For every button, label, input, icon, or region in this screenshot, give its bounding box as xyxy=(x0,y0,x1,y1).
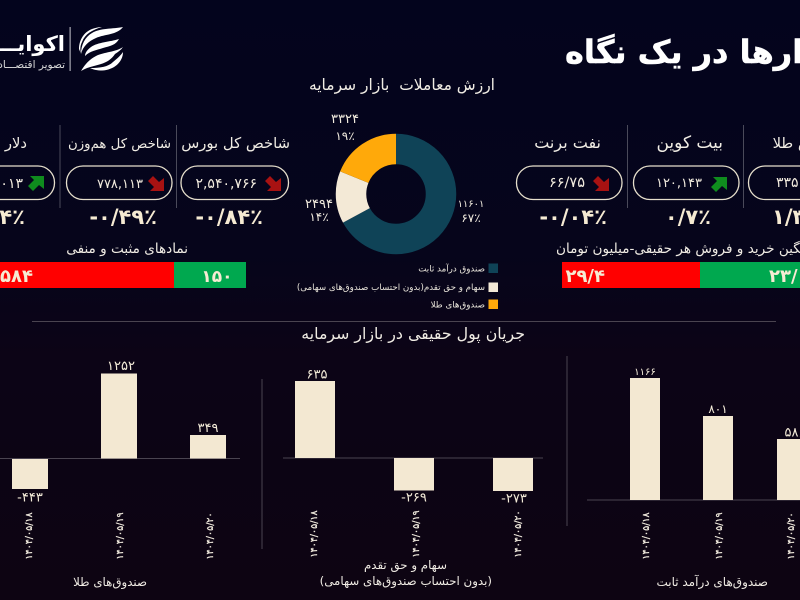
chart: fixed income funds: ۱۴۰۴/۰۵/۱۸ xyxy=(641,512,652,560)
card: dollar xyxy=(0,135,54,229)
card: gold xyxy=(748,135,800,229)
icon: down arrow xyxy=(148,176,164,191)
card: bitcoin: ۱۲۰,۱۴۳ xyxy=(656,176,702,191)
chart: fixed income funds: ۸۰۱ xyxy=(708,402,728,416)
legend: صندوق‌های طلا xyxy=(431,300,485,310)
card: total index xyxy=(181,135,290,229)
donut labels xyxy=(305,112,484,225)
logo tagline: تصویر اقتصـــاد xyxy=(0,59,65,71)
chart: stocks and rights xyxy=(283,368,543,589)
card: bitcoin: بیت کوین xyxy=(656,133,723,153)
icon: up arrow xyxy=(28,176,44,191)
bar: average buy and sell xyxy=(562,262,800,288)
donut labels: ۶۷٪ xyxy=(461,211,481,225)
chart: gold funds: ۱۴۰۴/۰۵/۲۰ xyxy=(205,512,216,560)
chart: gold funds: -۴۴۳ xyxy=(17,490,43,506)
dividers between cards xyxy=(60,125,744,208)
chart: gold funds: ۳۴۹ xyxy=(198,421,218,436)
donut labels: ۱۱۶۰۱ xyxy=(458,199,484,210)
legend xyxy=(297,262,498,310)
icon: logo mark xyxy=(79,27,123,71)
card: bitcoin xyxy=(634,133,739,229)
chart caption: صندوق‌های درآمد ثابت xyxy=(656,574,768,590)
card: brent oil: -۰/۰۴٪ xyxy=(539,205,607,229)
chart caption: سهام و حق تقدم xyxy=(364,558,447,573)
chart: fixed income funds: ۱۴۰۴/۰۵/۱۹ xyxy=(714,512,725,560)
subtitle: trading value: ارزش معاملات بازار سرمایه xyxy=(309,76,495,94)
icon: up arrow xyxy=(711,177,727,192)
chart: stocks and rights: -۲۷۳ xyxy=(501,492,527,506)
donut labels: ۱۹٪ xyxy=(335,129,355,143)
chart: fixed income funds: ۱۴۰۴/۰۵/۲۰ xyxy=(786,512,797,560)
chart: stocks and rights: (بدون احتساب صندوق‌های سهامی) xyxy=(320,574,492,589)
bar: positive negative symbols xyxy=(0,262,246,288)
card: total index: شاخص کل بورس xyxy=(181,135,290,152)
chart: gold funds: ۱۴۰۴/۰۵/۱۸ xyxy=(24,512,35,560)
chart caption: صندوق‌های طلا xyxy=(73,575,147,590)
chart: stocks and rights: ۱۴۰۴/۰۵/۲۰ xyxy=(513,510,524,558)
heading: positive and negative symbols: نمادهای مثبت و منفی xyxy=(66,241,188,257)
legend: سهام و حق تقدم(بدون احتساب صندوق‌های سهامی) xyxy=(297,283,485,293)
legend: صندوق درآمد ثابت xyxy=(418,262,485,274)
card: total index: -۰/۸۴٪ xyxy=(195,205,263,229)
chart: gold funds: ۱۲۵۲ xyxy=(107,359,135,374)
card: equal weight index: -۰/۴۹٪ xyxy=(89,205,157,229)
card: brent oil: ۶۶/۷۵ xyxy=(549,175,585,191)
vertical dividers between charts xyxy=(262,356,568,549)
icon: down arrow xyxy=(265,176,281,191)
card: equal weight index: شاخص کل هم‌وزن xyxy=(68,137,171,152)
card: equal weight index xyxy=(66,137,172,229)
card: bitcoin: ۰/۷٪ xyxy=(665,205,711,229)
logo xyxy=(0,27,123,71)
donut chart xyxy=(305,112,484,239)
donut labels: ۳۳۲۴ xyxy=(331,112,359,127)
chart: stocks and rights: ۱۴۰۴/۰۵/۱۹ xyxy=(411,510,422,558)
donut labels: ۱۴٪ xyxy=(309,210,329,224)
bar: average buy and sell: ۲۹/۴ xyxy=(565,266,605,287)
card: equal weight index: ۷۷۸,۱۱۳ xyxy=(97,177,143,192)
chart: stocks and rights: ۱۴۰۴/۰۵/۱۸ xyxy=(309,510,320,558)
donut labels: ۲۴۹۴ xyxy=(305,197,333,212)
heading: real money flow: جریان پول حقیقی در بازار سرمایه xyxy=(301,324,525,344)
icon: down arrow xyxy=(593,176,609,191)
chart: stocks and rights: -۲۶۹ xyxy=(401,490,427,506)
bar: positive negative symbols: ۱۵۰ xyxy=(201,267,233,287)
chart: gold funds xyxy=(0,359,240,590)
card: brent oil: نفت برنت xyxy=(534,133,601,153)
card: brent oil xyxy=(516,133,622,229)
chart: stocks and rights: ۶۳۵ xyxy=(307,368,327,382)
horizontal divider xyxy=(32,321,776,322)
chart: gold funds: ۱۴۰۴/۰۵/۱۹ xyxy=(115,512,126,560)
chart: fixed income funds xyxy=(587,367,800,590)
card: total index: ۲,۵۴۰,۷۶۶ xyxy=(195,176,257,192)
chart: fixed income funds: ۱۱۶۶ xyxy=(634,367,656,378)
